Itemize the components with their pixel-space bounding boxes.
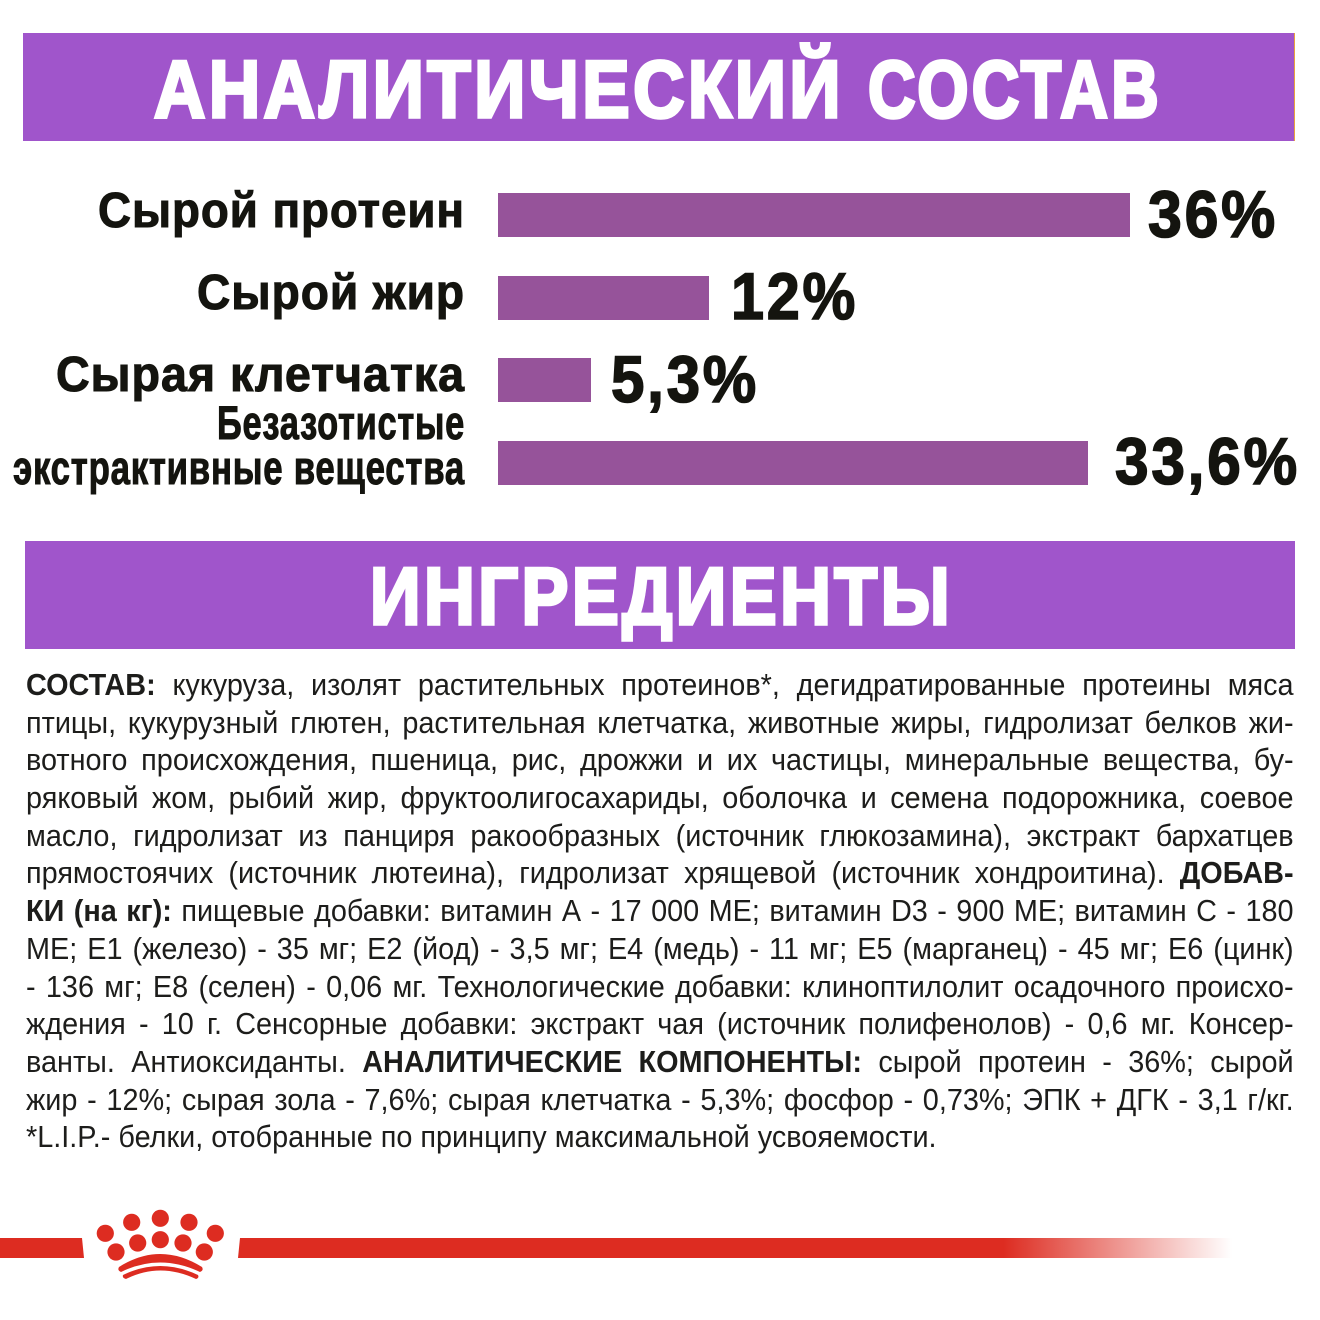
text block: ingredients list: СОСТАВ: кукуруза, изолят растительных протеинов*, дегидратированные протеины мяса [26,667,1294,702]
row: crude protein: 36% [1148,177,1278,251]
row: crude fat [197,259,858,333]
text block: ingredients list: МЕ; Е1 (железо) - 35 мг; Е2 (йод) - 3,5 мг; Е4 (медь) - 11 мг; Е5 (марганец) - 45 мг; Е6 (цинк) [26,931,1294,966]
row: crude protein [98,177,1278,251]
heading: analytical composition: СОСТАВ [868,45,1162,135]
row: nitrogen-free extract: экстрактивные вещества [13,441,465,494]
panel: analytical composition header [23,33,1295,141]
text block: ingredients list: жир - 12%; сырая зола - 7,6%; сырая клетчатка - 5,3%; фосфор - 0,73%; ЭПК + ДГК - 3,1 г/кг. [26,1082,1294,1117]
text block: ingredients list: ряковый жом, рыбий жир, фруктоолигосахариды, оболочка и семена подорожника, соевое [26,780,1294,815]
text block: ingredients list [26,667,1294,1154]
row: crude fiber [56,342,759,416]
row: crude protein: Сырой протеин [98,184,465,238]
row: nitrogen-free extract: Безазотистые [217,396,465,449]
icon: Royal Canin crown logo [97,1210,224,1279]
text block: ingredients list: прямостоячих (источник лютеина), гидролизат хрящевой (источник хондроитина). ДОБАВ- [26,855,1294,890]
row: crude fiber: 5,3% [611,342,759,416]
text block: ingredients list: ждения - 10 г. Сенсорные добавки: экстракт чая (источник полифенолов) - 0,6 мг. Консер- [26,1006,1294,1041]
text block: ingredients list: - 136 мг; Е8 (селен) - 0,06 мг. Технологические добавки: клиноптилолит осадочного происхо- [26,968,1294,1004]
text block: ingredients list: ванты. Антиоксиданты. АНАЛИТИЧЕСКИЕ КОМПОНЕНТЫ: сырой протеин - 36%; сырой [26,1044,1294,1079]
heading: ingredients: ИНГРЕДИЕНТЫ [370,552,953,642]
row: crude fat: Сырой жир [197,266,465,320]
heading: analytical composition: АНАЛИТИЧЕСКИЙ [154,43,844,135]
text block: ingredients list: птицы, кукурузный глютен, растительная клетчатка, животные жиры, гидролизат белков жи- [26,705,1294,740]
row: nitrogen-free extract: 33,6% [1115,424,1300,498]
text block: ingredients list: КИ (на кг): пищевые добавки: витамин А - 17 000 МЕ; витамин D3 - 900 МЕ; витамин С - 180 [26,893,1294,928]
row: crude fiber: Сырая клетчатка [56,348,465,402]
text block: ingredients list: *L.I.P.- белки, отобранные по принципу максимальной усвояемости. [26,1119,937,1154]
footer band with logo [0,1210,1232,1279]
bar chart: nutrient composition [13,177,1300,498]
row: nitrogen-free extract [13,396,1300,498]
panel: ingredients header [25,541,1295,649]
row: crude fat: 12% [731,259,858,333]
text block: ingredients list: вотного происхождения, пшеница, рис, дрожжи и их частицы, минеральные вещества, бу- [26,742,1294,777]
text block: ingredients list: масло, гидролизат из панциря ракообразных (источник глюкозамина), экстракт бархатцев [26,818,1294,853]
